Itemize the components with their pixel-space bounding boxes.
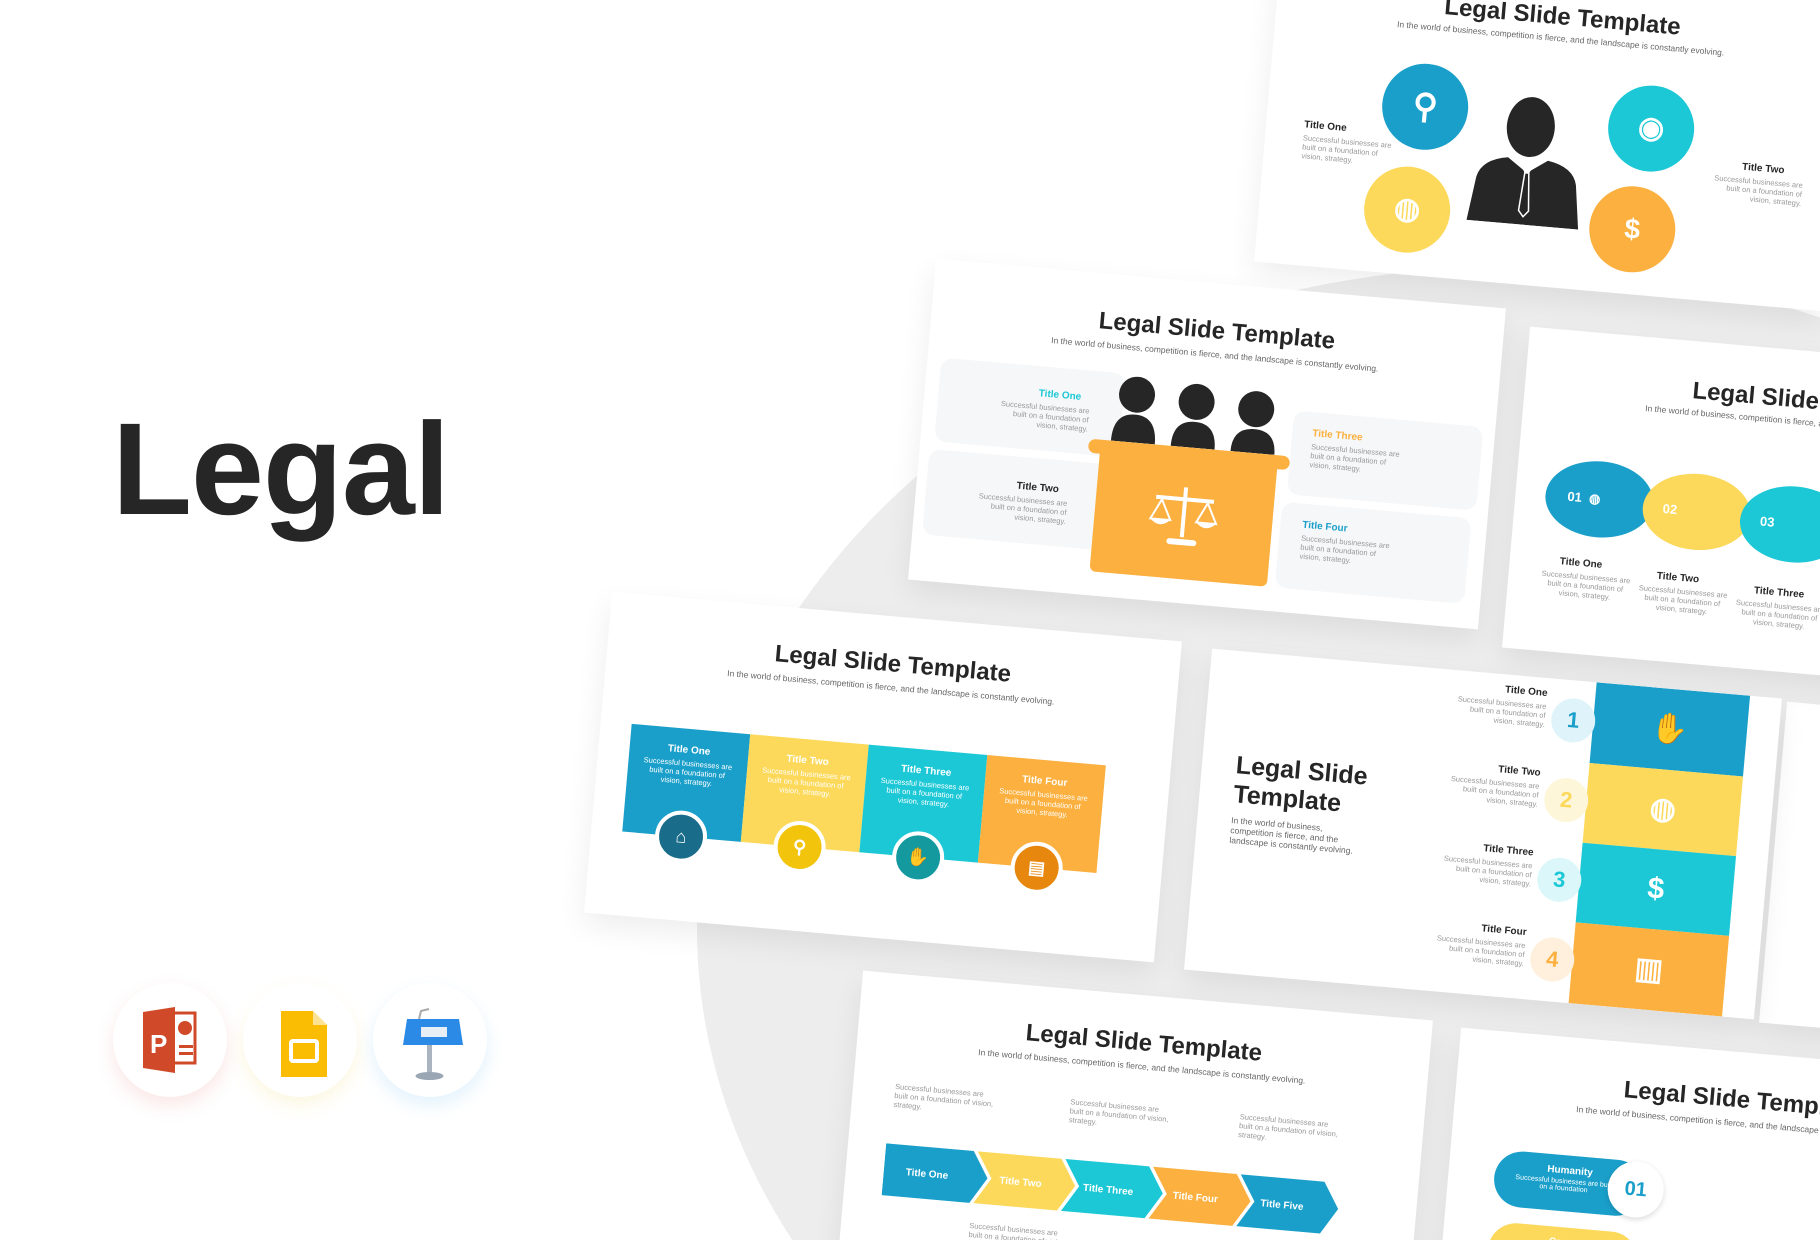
panel: right top — [1287, 410, 1484, 511]
color blocks: ▥ — [1633, 952, 1664, 987]
list texts: Title Four — [1481, 923, 1527, 938]
panel: left bottom — [922, 449, 1114, 551]
slide2 subtitle: In the world of business, competition is fierce, and the landscape is constantly evolving. — [1051, 335, 1379, 374]
texts under fish — [1541, 556, 1820, 631]
column: Title One blue: Successful businesses are built on a foundation of vision, strategy. — [643, 755, 733, 788]
number circles: 2 — [1559, 787, 1574, 813]
panel: right top: Title Three — [1312, 428, 1363, 444]
icon: Keynote — [373, 983, 487, 1097]
column: Title Four orange: Title Four — [1022, 774, 1068, 789]
circle: yellow — [1361, 163, 1454, 256]
list texts: Successful businesses are built on a foundation of vision, strategy. — [1457, 694, 1547, 729]
fish: 03 cyan — [1737, 482, 1820, 567]
texts under fish: Title Three — [1753, 585, 1805, 601]
chevron arrows: Title Five — [1260, 1198, 1304, 1213]
color blocks: $ — [1646, 872, 1666, 906]
slide5 heading: Template — [1232, 780, 1342, 817]
slide4 title: Legal Slide Template — [774, 640, 1012, 688]
slide 1: top right, person with circles — [1254, 0, 1820, 311]
slide 1: top right, person with circles: Successful businesses are built on a foundation of vision, strategy. — [1714, 173, 1803, 208]
icon: Google Slides — [243, 983, 357, 1097]
icon: three people — [1110, 376, 1274, 455]
texts under fish: Successful businesses are built on a foundation of vision, strategy. — [1638, 583, 1728, 616]
slide 5: numbered list — [1184, 649, 1782, 1019]
fish: 01 blue: 01 ◍ — [1567, 489, 1601, 506]
pill: Humanity: Successful businesses are built on a foundation — [1515, 1174, 1613, 1194]
fish: 03 cyan: 03 — [1759, 513, 1775, 530]
panel: left top: Successful businesses are built on a foundation of vision, strategy. — [1001, 399, 1090, 434]
column icons — [653, 808, 709, 865]
columns: ⚲ — [792, 836, 807, 858]
chevron arrows: Title Three — [1083, 1183, 1134, 1198]
color blocks — [1568, 682, 1750, 1016]
icon: person — [1466, 97, 1578, 230]
panel: left top: Title One — [1038, 388, 1082, 403]
list texts: Title Two — [1498, 764, 1541, 779]
slide 2: podium — [908, 259, 1506, 629]
column: Title Three cyan: Title Three — [901, 764, 952, 779]
background shape: grey ellipse — [697, 267, 1820, 1240]
circle: orange — [1586, 183, 1679, 276]
slide4 subtitle: In the world of business, competition is fierce, and the landscape is constantly evolving. — [727, 668, 1055, 707]
pill: Humanity: Humanity — [1547, 1164, 1593, 1179]
list texts: Successful businesses are built on a foundation of vision, strategy. — [1437, 933, 1526, 968]
podium with scales — [1088, 439, 1290, 586]
panel: left top — [934, 358, 1126, 457]
chevron arrows: Title Four — [1172, 1191, 1218, 1205]
slide6 title: Legal Slide Template — [1025, 1019, 1263, 1067]
column: Title Two yellow: Title Two — [786, 754, 829, 768]
column: Title Two yellow: Successful businesses are built on a foundation of vision, strategy. — [762, 765, 851, 798]
columns: ▤ — [1027, 857, 1046, 878]
color blocks: ✋ — [1650, 711, 1690, 747]
chevron arrows: Title Two — [999, 1175, 1042, 1190]
list texts: Successful businesses are built on a foundation of vision, strategy. — [1444, 854, 1533, 888]
panel: right bottom — [1275, 502, 1472, 604]
column: Title Four orange: Successful businesses are built on a foundation of vision, strategy. — [999, 786, 1088, 819]
color blocks: ◍ — [1648, 792, 1677, 827]
column icons: ⌂ — [675, 826, 687, 847]
slide2 title: Legal Slide Template — [1098, 307, 1336, 355]
number circles: 4 — [1545, 946, 1560, 972]
number circles — [1530, 698, 1596, 982]
slide1 subtitle: In the world of business, competition is fierce, and the landscape is constantly evolving. — [1397, 19, 1725, 58]
text blocks above arrows: Successful businesses are built on a foundation of vision, strategy. — [893, 1082, 994, 1111]
columns: ✋ — [906, 846, 930, 868]
fish: 01 blue — [1542, 457, 1656, 542]
list texts — [1437, 684, 1548, 968]
number 01: 01 — [1624, 1178, 1648, 1201]
text: Title One: Title One — [1304, 119, 1347, 134]
circle: cyan — [1605, 82, 1698, 175]
icon: PowerPoint — [113, 983, 227, 1097]
columns — [622, 724, 1106, 890]
column: Title Two yellow — [741, 734, 869, 852]
chevron arrows: Title One — [905, 1167, 949, 1182]
circle: orange: $ — [1623, 213, 1641, 245]
center icon circle — [1666, 1237, 1763, 1240]
panel: right bottom: Successful businesses are built on a foundation of vision, strategy. — [1299, 534, 1390, 565]
panel: right bottom: Title Four — [1302, 520, 1348, 535]
number circles: 1 — [1566, 707, 1580, 733]
number 01 — [1605, 1159, 1666, 1220]
panel: right top: Successful businesses are built on a foundation of vision, strategy. — [1309, 442, 1400, 473]
app icons row — [110, 1007, 492, 1110]
number circles: 3 — [1552, 866, 1567, 892]
slide5 subtitle: In the world of business, competition is fierce, and the landscape is constantly evolving. — [1229, 815, 1353, 856]
list texts: Title One — [1505, 684, 1548, 699]
slide 4: four columns — [584, 592, 1182, 962]
circle: yellow: ◍ — [1393, 192, 1422, 227]
list texts: Successful businesses are built on a foundation of vision, strategy. — [1451, 774, 1540, 809]
slide 6: arrows: Successful businesses are built on a foundation of vision, strategy. — [1069, 1097, 1169, 1127]
slide 6: arrows — [835, 971, 1433, 1240]
texts under fish: Title Two — [1656, 571, 1700, 585]
heading: Legal: Legal — [112, 395, 449, 542]
texts under fish: Successful businesses are built on a foundation of vision, strategy. — [1541, 569, 1631, 602]
fish: 02 yellow — [1640, 469, 1754, 554]
circle: cyan: ◉ — [1637, 110, 1666, 146]
slide6 subtitle: In the world of business, competition is fierce, and the landscape is constantly evolving. — [978, 1047, 1306, 1086]
column: Title Four orange — [978, 755, 1106, 873]
circle: blue search — [1379, 60, 1472, 153]
fish: 02 yellow: 02 — [1662, 501, 1678, 517]
pill: Group — [1486, 1221, 1640, 1240]
slide5 heading: Legal Slide — [1235, 751, 1369, 791]
slide5 heading — [1232, 751, 1369, 817]
column: Title One blue: Title One — [667, 743, 711, 758]
slide 8: far right partial — [1759, 702, 1820, 1072]
circle: blue search: ⚲ — [1411, 87, 1439, 127]
slide 7: pills — [1433, 1028, 1820, 1240]
texts under fish: Title One — [1559, 556, 1603, 571]
text: Title Two: Title Two — [1742, 162, 1785, 176]
list texts: Title Three — [1483, 843, 1534, 858]
column: Title Three cyan: Successful businesses are built on a foundation of vision, strategy. — [880, 776, 970, 809]
panel: left bottom: Title Two — [1016, 481, 1059, 495]
panel: left bottom: Successful businesses are built on a foundation of vision, strategy. — [978, 491, 1068, 526]
pill: Humanity — [1492, 1149, 1646, 1218]
icon: PowerPoint: P — [150, 1029, 167, 1059]
slide 6: arrows: Successful businesses are built on a foundation of vision, strategy. — [1238, 1112, 1338, 1141]
slide 3: right, fish shapes — [1502, 327, 1820, 697]
chevron arrows — [882, 1143, 1338, 1234]
column: Title One blue — [622, 724, 750, 842]
slide 1: top right, person with circles: Successful businesses are built on a foundation of vision, strategy. — [1301, 133, 1392, 165]
column: Title Three cyan — [859, 745, 987, 863]
